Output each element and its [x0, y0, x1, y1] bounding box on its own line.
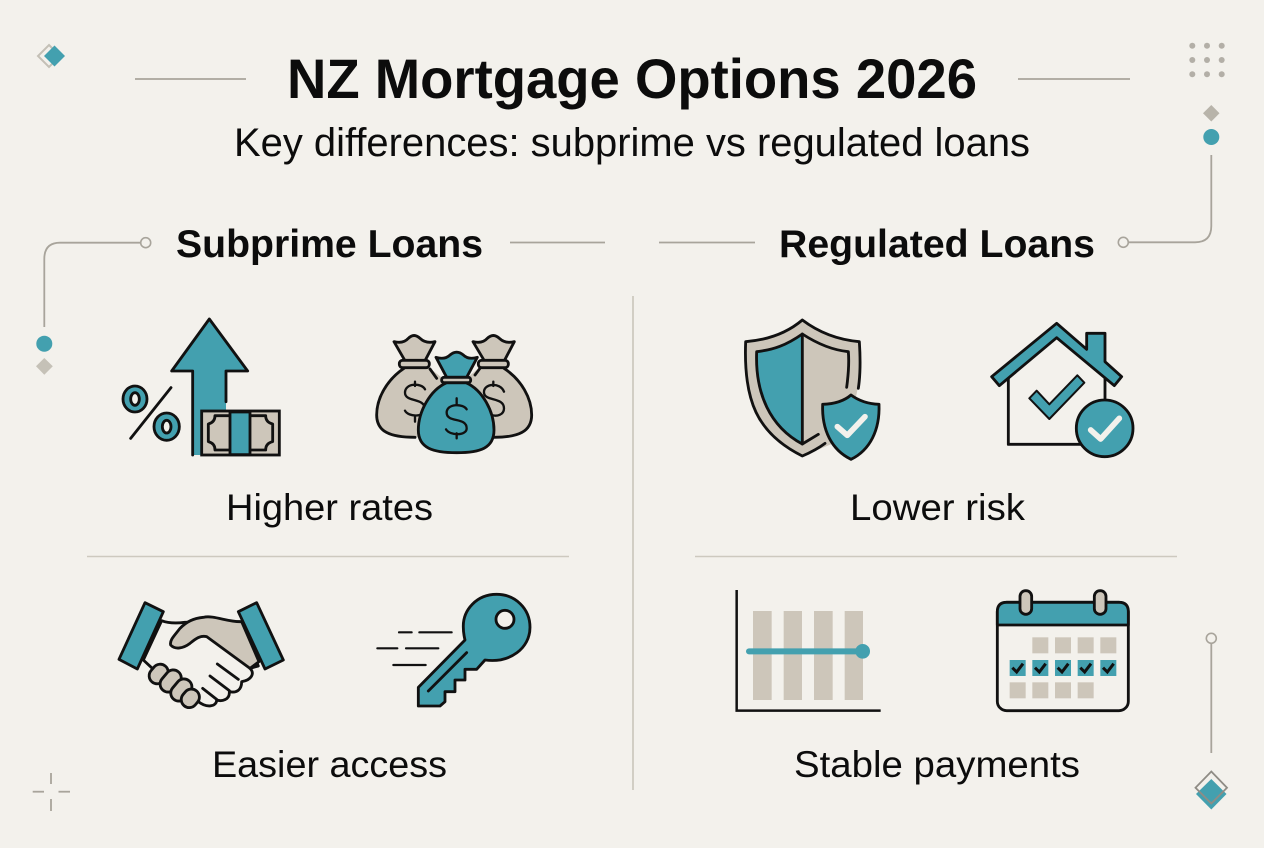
label: stable payments: Stable payments: [794, 744, 1080, 785]
title: NZ Mortgage Options 2026: [287, 47, 977, 110]
icon: key with speed lines: [377, 594, 530, 706]
decoration: bottom-right connector and diamonds: [1196, 633, 1227, 810]
icon: calendar with checks: [997, 591, 1128, 711]
heading: subprime loans: Subprime Loans: [176, 223, 483, 266]
icon: house with check: [992, 323, 1133, 457]
decoration: left connector: [36, 238, 151, 375]
label: higher rates: Higher rates: [226, 487, 433, 528]
panel: regulated loans: [737, 223, 1133, 785]
icon: money bags: [377, 335, 532, 453]
decoration: top-left diamonds: [38, 45, 65, 67]
heading: regulated loans: Regulated Loans: [779, 223, 1095, 266]
icon: bar chart with steady line: [737, 590, 881, 711]
label: lower risk: Lower risk: [850, 487, 1026, 528]
panel: subprime loans: [119, 223, 532, 785]
icon: shield with badge: [745, 320, 879, 459]
label: easier access: Easier access: [212, 744, 447, 785]
icon: handshake: [119, 603, 283, 711]
icon: rising rate arrow with percent and banknote: [123, 319, 279, 455]
decoration: dot grid: [1189, 43, 1225, 77]
decoration: crosshair: [33, 773, 70, 811]
decoration: top-right connector: [1118, 105, 1220, 247]
subtitle: Key differences: subprime vs regulated loans: [234, 121, 1030, 165]
